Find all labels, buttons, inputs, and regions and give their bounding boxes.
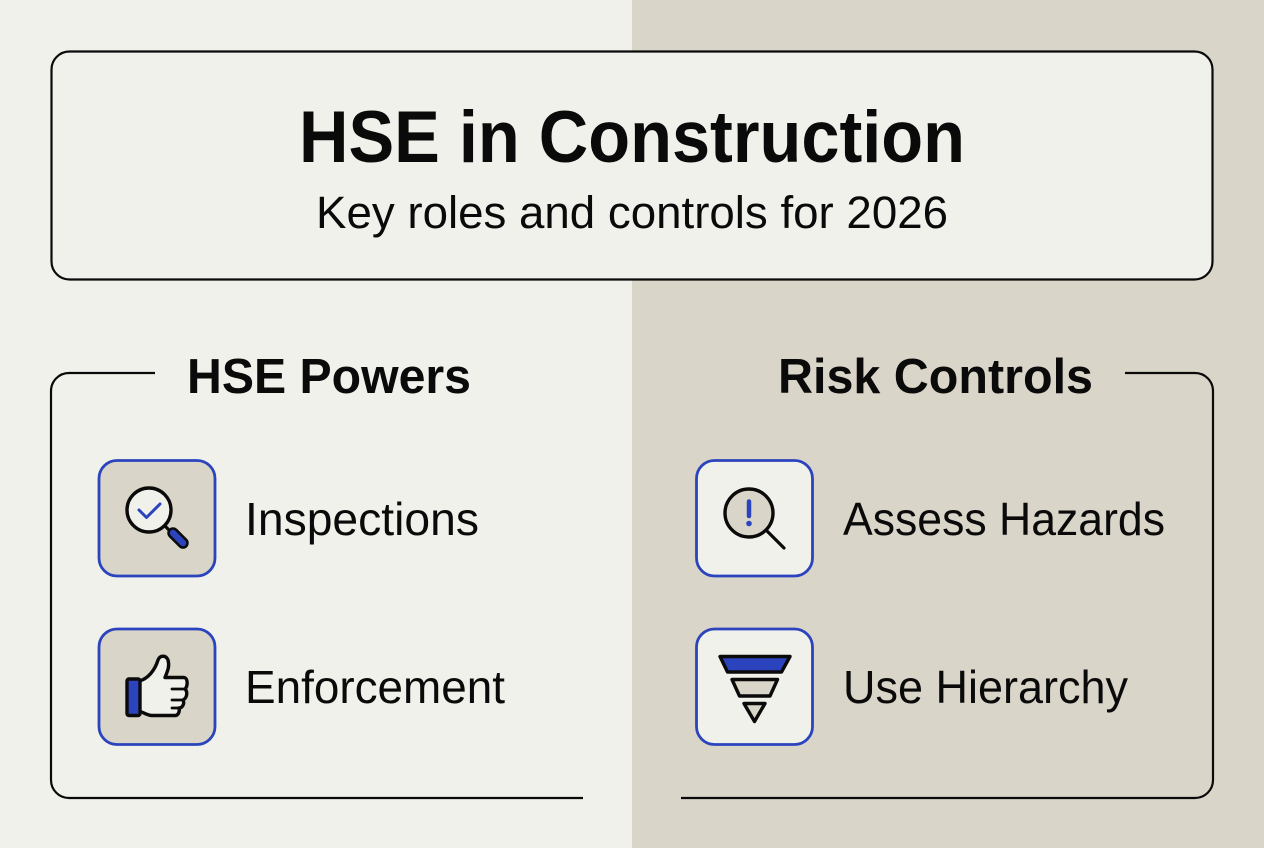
heading: HSE Powers: HSE Powers bbox=[187, 350, 471, 404]
icon: inspection magnifier bbox=[99, 460, 215, 576]
panel: HSE Powers bbox=[51, 350, 583, 798]
panel: Risk Controls bbox=[681, 350, 1213, 798]
title: HSE in Construction bbox=[299, 97, 965, 178]
icon: hazard magnifier bbox=[696, 460, 812, 576]
label: Use Hierarchy: Use Hierarchy bbox=[843, 661, 1128, 713]
label: Inspections: Inspections bbox=[245, 493, 479, 545]
label: Assess Hazards: Assess Hazards bbox=[843, 493, 1165, 545]
panel: header bbox=[52, 52, 1212, 280]
heading: Risk Controls: Risk Controls bbox=[778, 350, 1093, 404]
subtitle: Key roles and controls for 2026 bbox=[316, 187, 948, 238]
icon: hierarchy funnel bbox=[696, 629, 812, 744]
label: Enforcement: Enforcement bbox=[245, 661, 505, 713]
icon: thumbs up bbox=[99, 629, 215, 744]
